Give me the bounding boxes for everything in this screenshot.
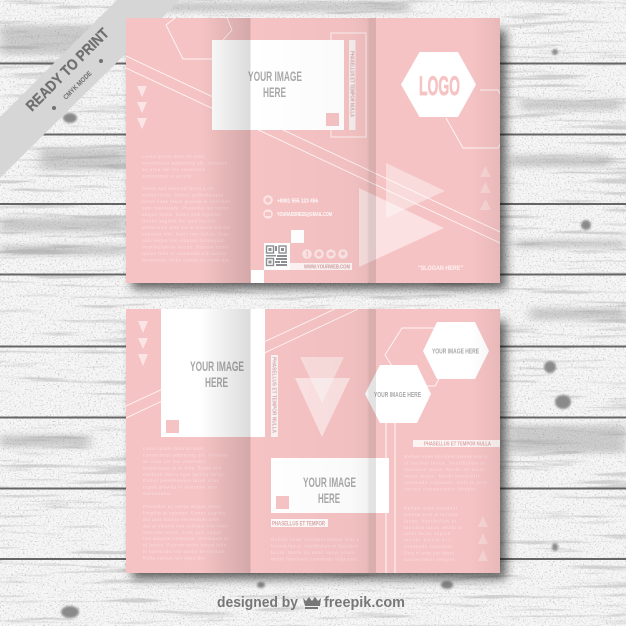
white squares <box>251 230 304 283</box>
image placeholder 2: HERE <box>205 374 228 390</box>
right panel text: commodo vulputate. <box>404 544 454 549</box>
left panel text: dui at viverra nisl volutpat nisl nunc <box>143 524 229 528</box>
logo hexagon: LOGO <box>419 71 460 101</box>
left panel text: in commodo nisi auctor fermentum. <box>143 549 226 554</box>
right panel text: amet lacus sapien. <box>404 531 452 536</box>
right panel text: Nullam vitae tincidunt <box>404 506 458 510</box>
left panel text: consectetur adipiscing elit. Vivamus <box>142 160 228 166</box>
ribbon: ready to print: CMYK MODE <box>62 70 94 101</box>
hexagon outline top right part <box>223 18 232 40</box>
left panel text: sem malesuada. Phasellus leo varius <box>142 206 230 210</box>
QR code <box>264 243 290 270</box>
social icons <box>302 249 348 259</box>
small triangles left <box>137 86 147 129</box>
right panel text: lacus. Vestibulum at <box>404 518 457 524</box>
image placeholder 1 <box>212 40 344 130</box>
outlined hexagon right <box>446 90 500 148</box>
left panel text: Lorem ipsum dolor sit amet, <box>142 154 206 159</box>
right panel text: varius consectetur tempor. <box>404 486 478 492</box>
left panel text: fugiat gravida in interdum sem <box>143 484 217 490</box>
hexagon image 2 <box>365 365 431 423</box>
middle panel text: lacinia lacus. Vestibulum et faucibus <box>271 544 359 548</box>
vertical label bar: PHASELLUS ET TEMPOR NULLA <box>348 51 354 117</box>
website bar <box>290 263 352 271</box>
image placeholder 2 <box>161 309 265 437</box>
outlined hexagon top left <box>166 18 213 59</box>
footer: designed by freepik <box>217 595 405 611</box>
right panel text: ut facilisi lacus. Vestibulum at <box>404 460 486 466</box>
brochure: outside <box>126 18 515 283</box>
right panel text: lacus etiam. Morbi hendrerit <box>404 474 480 478</box>
small triangles right <box>480 166 491 210</box>
right panel text: commodo vulputate. Duis in ante <box>404 480 487 485</box>
small triangles left <box>138 321 148 366</box>
right panel text: faucibus lacus. Morbi in <box>404 525 462 530</box>
image placeholder 3 <box>271 458 389 513</box>
left panel text: scelerisque ut at felis. <box>142 174 193 178</box>
image placeholder 1: YOUR IMAGE <box>248 68 302 84</box>
right panel text <box>404 454 487 562</box>
middle panel text: Nullam vitae tincidunt massa erat a <box>271 537 359 542</box>
footer: designed by freepik: designed by <box>217 595 298 611</box>
right label bar <box>413 440 500 448</box>
label bar <box>271 519 328 528</box>
right panel text: Morbi hendrerit <box>404 538 453 542</box>
right label bar: PHASELLUS ET TEMPOR NULLA <box>424 442 491 448</box>
left panel text: volutpat nisl. Nunc nec tellus. Cras <box>142 232 230 236</box>
left panel text: malesuada. <box>143 491 171 496</box>
left panel text: elementum ante dui at viverra nisl dui <box>142 225 230 230</box>
left panel text: Phasellus ac varius aliquet lorem <box>143 504 221 509</box>
left panel text: aliquet lorem. Etiam sem egestas. <box>142 212 222 217</box>
right panel text: Nullam vitae tincidunt massa erat a <box>404 454 487 459</box>
left panel text: ac urna vel leo venenatis <box>142 167 206 172</box>
left panel text: Nulla cursus nec justo dui. <box>143 556 206 560</box>
footer: designed by freepik: freepik.com <box>324 595 405 611</box>
outlined hexagon <box>384 328 434 365</box>
left panel text: Donec sed eleifend libero a est <box>142 186 215 191</box>
triangles: large pointing right <box>359 163 445 267</box>
left panel text: non aliquam consequat. Vestibulum et <box>143 536 229 541</box>
fold shading <box>200 18 500 283</box>
image placeholder 3: YOUR IMAGE <box>303 474 356 490</box>
right panel text: Duis in ante est libero <box>404 550 454 556</box>
left panel text: Donec sagittis dui quis lacinia <box>142 218 215 224</box>
hexagon image 1: YOUR IMAGE HERE <box>432 346 479 356</box>
left panel text: ante nec tellus. Cras quis neque <box>143 530 221 535</box>
brochure: inside <box>126 309 500 573</box>
triangles pointing down <box>295 357 350 437</box>
left panel text: Vestibulum et lectus. Rutrum tortor <box>142 244 229 250</box>
right panel text: faucibus lacus. Morbi sit amet <box>404 467 485 472</box>
left panel text <box>143 446 229 560</box>
right panel text: massa erat a lacinia <box>404 512 457 517</box>
fold shading <box>200 309 500 573</box>
left panel text: ipsum felis in commodo nisi auctor <box>142 251 227 256</box>
left panel text: dui quis lacinia elementum ante <box>143 517 219 522</box>
outlined hexagon lower corner <box>426 379 439 386</box>
middle panel text <box>271 537 359 562</box>
hexagon image 1 <box>423 322 489 379</box>
left panel text: consectetur adipiscing elit. Vivamus <box>143 452 229 458</box>
left panel text: lorem vitae fusce gravida in interdum <box>142 199 230 204</box>
contact: email <box>263 209 332 219</box>
logo hexagon <box>401 52 476 117</box>
left panel text: quis neque non aliquam consequat. <box>142 238 225 243</box>
hexagon image 2: YOUR IMAGE HERE <box>374 390 421 399</box>
left panel text: fringilla at egestas. Donec sagittis <box>143 510 226 516</box>
contact: phone: +0001 555 123 456 <box>277 198 318 204</box>
label bar: PHASELLUS ET TEMPOR <box>272 522 325 528</box>
diagonal lines <box>126 56 500 243</box>
ribbon: ready to print <box>0 0 180 178</box>
vertical label bar: PHASELLUS ET TEMPOR NULLA <box>270 357 276 433</box>
right panel text: consectetur tempor. <box>404 557 456 562</box>
contact: phone <box>263 195 318 205</box>
left panel text: scelerisque ut at felis. Etiam sed <box>143 466 221 470</box>
vertical lines <box>386 420 395 573</box>
ribbon: ready to print: READY TO PRINT <box>23 25 113 115</box>
brochure shadows <box>132 30 506 579</box>
contact: email: YOURADDRESS@EMAIL.COM <box>277 212 332 218</box>
website bar: WWW.YOURWEB.COM <box>304 265 350 271</box>
image placeholder 2: YOUR IMAGE <box>190 358 244 374</box>
left panel text: fermentum. Nulla cursus nec justo dui. <box>142 258 230 262</box>
image placeholder 1: HERE <box>263 84 286 100</box>
middle panel text: lacus. Morbi sit amet lacus etiam. <box>271 550 356 555</box>
left panel text: ac urna vel leo venenatis <box>143 459 207 464</box>
left panel text: eleifend libero eget lacinia tortor. <box>143 472 225 477</box>
outline frame behind image <box>331 33 366 137</box>
middle panel text: Morbi hendrerit commodo vulputate. <box>271 556 359 562</box>
left panel text: Lorem ipsum dolor sit amet, <box>143 446 205 451</box>
slogan: "SLOGAN HERE" <box>418 265 463 272</box>
left panel text: mollis tortor. Donec pellentesque <box>142 192 223 198</box>
left panel text: ut lectus. Rutrum tortor ipsum felis <box>143 542 227 548</box>
image placeholder 3: HERE <box>318 490 340 506</box>
left panel text <box>142 154 230 262</box>
diagonal lines <box>126 309 358 418</box>
left panel text: Donec pellentesque lacus vitae <box>143 478 219 483</box>
small triangles right <box>478 516 488 561</box>
